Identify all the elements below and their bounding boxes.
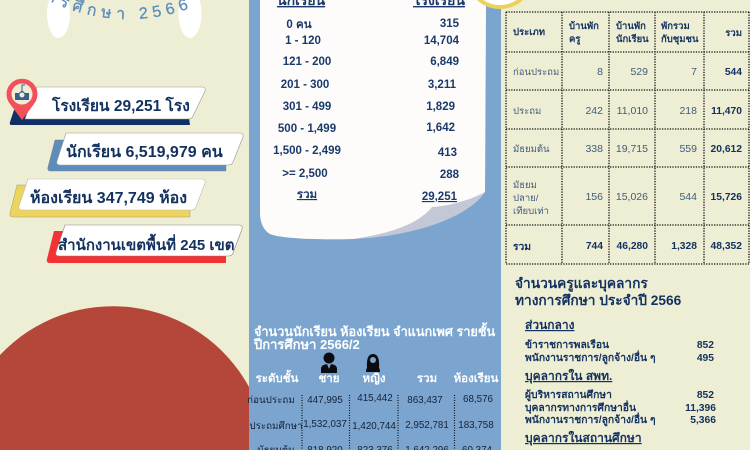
section: area office staff: 852 <box>697 390 714 401</box>
table: students by level: 1,420,744 <box>352 421 396 432</box>
section: central: พนักงานราชการ/ลูกจ้าง/อื่น ๆ <box>525 350 655 365</box>
stat: students: นักเรียน 6,519,979 คน <box>66 142 223 161</box>
body rows: 15,026 <box>616 191 648 203</box>
stat: district offices <box>47 225 242 263</box>
table: students by level: ชาย <box>318 373 340 385</box>
section: central: ส่วนกลาง <box>525 318 575 332</box>
header row: นักเรียน <box>616 33 649 45</box>
right column: school counts: 288 <box>440 169 460 181</box>
totals <box>513 67 742 253</box>
white ribbon shape right <box>178 0 202 38</box>
table: students by level: 863,437 <box>407 395 443 406</box>
table: students by level: รวม <box>417 373 437 385</box>
body rows: 11,010 <box>617 105 648 117</box>
section: area office staff: ผู้บริหารสถานศึกษา <box>525 389 612 402</box>
body rows: 242 <box>585 105 603 117</box>
paper sheet: schools by student count <box>260 0 486 239</box>
body rows: 19,715 <box>616 143 648 155</box>
section: area office staff <box>525 368 716 427</box>
right column: school counts: 14,704 <box>424 35 460 47</box>
section: central: 852 <box>697 340 714 351</box>
panel: left overview <box>0 0 249 450</box>
table: boarding schools <box>506 12 749 264</box>
decorative red circle <box>0 306 249 450</box>
header row: บ้านพัก <box>569 20 599 32</box>
table: students by level: ห้องเรียน <box>454 372 499 385</box>
left column: size ranges: 1 - 120 <box>285 35 321 47</box>
heading: students and classrooms by gender: จำนวนนักเรียน ห้องเรียน จำแนกเพศ รายชั้น <box>254 322 495 339</box>
stat: schools: โรงเรียน 29,251 โรง <box>51 96 190 115</box>
body rows: 559 <box>679 143 697 155</box>
right column: school counts: 413 <box>438 147 457 159</box>
left column: size ranges: 121 - 200 <box>283 56 331 68</box>
section: area office staff: บุคลากรทางการศึกษาอื่น <box>525 400 637 415</box>
left column: size ranges: 301 - 499 <box>283 101 331 113</box>
table: students by level: 183,758 <box>458 420 494 431</box>
header row: ประเภท <box>513 26 545 38</box>
body rows: 7 <box>691 66 697 78</box>
icon: location pin with school <box>6 79 38 120</box>
body rows: 529 <box>630 66 648 78</box>
body rows: มัธยม <box>513 180 537 191</box>
totals: 1,328 <box>671 241 697 252</box>
section: school staff: บุคลากรในสถานศึกษา <box>525 430 642 446</box>
right column: school counts: 1,829 <box>426 101 455 113</box>
table: students by level: 415,442 <box>357 393 393 404</box>
body rows: 338 <box>585 143 603 155</box>
table: students by level <box>247 369 499 450</box>
section: area office staff: บุคลากรใน สพท. <box>525 368 612 384</box>
body rows: ปลาย/ <box>513 193 539 204</box>
body rows <box>513 66 697 217</box>
totals: 46,280 <box>616 241 648 252</box>
section: central: ข้าราชการพลเรือน <box>525 338 610 351</box>
heading <box>515 276 682 308</box>
header row: พักรวม <box>661 21 690 32</box>
left column: size ranges: 201 - 300 <box>281 79 329 91</box>
stat: students <box>48 133 243 171</box>
section: central: 495 <box>697 353 714 364</box>
totals: 20,612 <box>710 144 742 155</box>
section: area office staff: 11,396 <box>685 403 716 414</box>
table: students by level: 2,952,781 <box>405 420 449 431</box>
stat: classrooms: ห้องเรียน 347,749 ห้อง <box>30 188 187 207</box>
table: students by level: ประถมศึกษา <box>249 420 303 432</box>
totals: 48,352 <box>710 241 742 252</box>
table: students by level: 447,995 <box>307 395 343 406</box>
icon: female <box>366 354 380 372</box>
totals: 544 <box>725 67 742 78</box>
right column: school counts <box>422 18 460 203</box>
header row: ครู <box>569 34 581 46</box>
stat: classrooms <box>10 179 205 217</box>
left column: size ranges: 1,500 - 2,499 <box>273 145 341 157</box>
left column: size ranges: 0 คน <box>286 19 312 31</box>
totals: 11,470 <box>711 106 742 117</box>
body rows: 156 <box>585 191 603 203</box>
body rows: ก่อนประถม <box>513 67 559 78</box>
table: students by level: 68,576 <box>463 394 494 405</box>
body rows: 218 <box>679 105 697 117</box>
section: central <box>525 318 714 365</box>
right column: school counts: 29,251 <box>422 191 458 203</box>
section: area office staff: 5,366 <box>690 415 716 426</box>
left column: size ranges: >= 2,500 <box>282 168 328 180</box>
panel: blue centre column <box>247 0 501 450</box>
left column: size ranges <box>273 19 341 201</box>
header row: รวม <box>725 28 742 39</box>
white ribbon shape left <box>47 0 70 38</box>
header row: กับชุมชน <box>661 34 699 45</box>
right column: school counts: 3,211 <box>428 79 457 91</box>
body rows: 544 <box>679 191 697 203</box>
panel: teachers and staff <box>515 276 716 446</box>
left column: size ranges: รวม <box>297 189 317 201</box>
table: students by level: ระดับชั้น <box>256 369 299 385</box>
icon: gold circle at top <box>468 0 532 7</box>
heading: students and classrooms by gender: ปีการศึกษา 2566/2 <box>253 337 360 352</box>
heading: จำนวนครูและบุคลากร <box>515 276 648 292</box>
body rows: มัธยมต้น <box>513 144 550 155</box>
table: students by level: 1,532,037 <box>303 419 347 430</box>
section: area office staff: พนักงานราชการ/ลูกจ้าง/อื่น ๆ <box>525 412 655 427</box>
left column: size ranges: 500 - 1,499 <box>278 123 336 135</box>
header row <box>513 20 742 46</box>
stat: district offices: สำนักงานเขตพื้นที่ 245 เขต <box>58 233 235 254</box>
right column: school counts: 1,642 <box>426 122 455 134</box>
table: students by level: หญิง <box>362 372 386 385</box>
heading: students and classrooms by gender <box>253 322 495 352</box>
stat: schools <box>6 79 205 125</box>
right column: school counts: 315 <box>440 18 460 30</box>
icon: male <box>321 352 337 373</box>
right column: school counts: 6,849 <box>430 56 459 68</box>
totals: รวม <box>513 242 531 253</box>
heading: ทางการศึกษา ประจำปี 2566 <box>515 293 682 308</box>
body rows: ประถม <box>513 106 541 117</box>
table: students by level: ก่อนประถม <box>247 395 295 406</box>
body rows: เทียบเท่า <box>513 205 549 217</box>
totals: 744 <box>586 241 603 252</box>
header row: บ้านพัก <box>616 20 646 32</box>
body rows: 8 <box>597 66 603 78</box>
totals: 15,726 <box>710 192 742 203</box>
